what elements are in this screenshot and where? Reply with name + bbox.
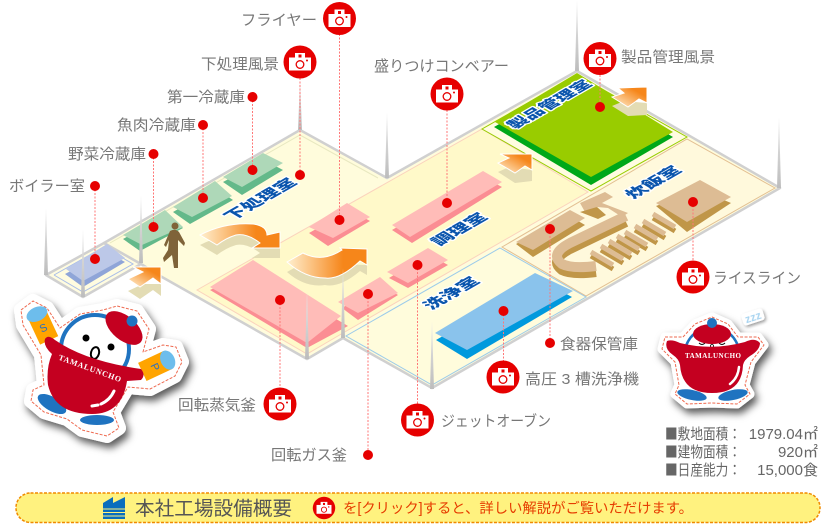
callout: tableware storage: 食器保管庫 bbox=[560, 335, 638, 353]
callout: tableware storage bbox=[545, 224, 638, 353]
room: rice cooking room bbox=[502, 139, 775, 296]
arrow: to product control bbox=[612, 87, 647, 116]
mascot: sleeping character: TAMALUNCHO bbox=[685, 352, 742, 360]
icon: camera bbox=[313, 497, 335, 519]
salt shaker bbox=[24, 303, 59, 345]
daily capacity bbox=[665, 459, 818, 480]
room label: washing room: 洗浄室 bbox=[419, 274, 484, 312]
callout: plating conveyor: 盛りつけコンベアー bbox=[374, 58, 509, 75]
site area bbox=[665, 423, 818, 444]
callout: vegetable cold room bbox=[68, 146, 158, 232]
callout: fryer: フライヤー bbox=[241, 12, 317, 29]
building area: 920㎡ bbox=[778, 444, 818, 461]
callout: rice line: ライスライン bbox=[713, 270, 801, 287]
callout: preparation scene bbox=[201, 46, 316, 180]
callout: rotary gas kettle bbox=[271, 289, 373, 464]
footer banner bbox=[16, 493, 820, 522]
callout: boiler room bbox=[9, 178, 100, 264]
equipment: high-pressure washer bbox=[435, 273, 573, 359]
site facts bbox=[665, 423, 818, 480]
equipment: fish and meat cold room bbox=[173, 181, 233, 224]
callout: rotary steam kettle bbox=[178, 295, 296, 420]
callout: high-pressure washer bbox=[486, 306, 639, 394]
mascot: salt and pepper character bbox=[21, 301, 182, 436]
callout: high-pressure washer: 高圧 3 槽洗浄機 bbox=[525, 371, 639, 388]
arrow: curved cooking flow bbox=[287, 248, 367, 285]
callout: rotary steam kettle: 回転蒸気釜 bbox=[178, 397, 256, 414]
room label: preparation room: 下処理室 bbox=[219, 176, 301, 223]
callout: fish and meat cold room: 魚肉冷蔵庫 bbox=[117, 117, 196, 134]
room label: product control room: 製品管理室 bbox=[502, 77, 596, 131]
equipment: rice line bbox=[557, 180, 731, 273]
pepper shaker bbox=[138, 348, 178, 381]
head bbox=[61, 315, 129, 383]
callout: jet oven bbox=[401, 260, 551, 436]
equipment: boiler bbox=[65, 244, 125, 287]
site area: ■敷地面積： bbox=[665, 423, 741, 444]
arrow: entry bbox=[128, 267, 161, 299]
equipment: tableware storage bbox=[516, 210, 585, 257]
site area: 1979.04㎡ bbox=[749, 426, 818, 443]
equipment: rotary gas kettle bbox=[338, 277, 398, 320]
feet bbox=[676, 387, 708, 403]
arrow: curved preparation flow bbox=[200, 224, 280, 258]
sleep bubble: zzz bbox=[744, 310, 763, 326]
hat bbox=[693, 324, 731, 344]
floor: boiler room bbox=[46, 243, 141, 297]
building area: ■建物面積： bbox=[665, 441, 741, 462]
room label: cooking room: 調理室 bbox=[427, 210, 492, 248]
pepper shaker: P bbox=[148, 361, 162, 373]
room: washing room bbox=[346, 248, 586, 385]
callout: first cold room bbox=[167, 89, 258, 175]
mascot: salt and pepper character: TAMALUNCHO bbox=[57, 353, 122, 384]
callout: fryer bbox=[241, 2, 356, 225]
body bbox=[45, 337, 143, 414]
callout: fish and meat cold room bbox=[117, 117, 208, 203]
equipment: fryer bbox=[309, 203, 370, 246]
sticker backing bbox=[662, 317, 764, 404]
equipment: vegetable cold room bbox=[123, 210, 183, 251]
arrow: cooking to product bbox=[498, 154, 532, 183]
footer title: 本社工場設備概要 bbox=[135, 498, 292, 520]
callout: plating conveyor bbox=[374, 58, 509, 208]
callout: boiler room: ボイラー室 bbox=[9, 178, 85, 195]
equipment: rotary steam kettle bbox=[210, 260, 348, 348]
sticker backing bbox=[21, 301, 182, 436]
daily capacity: ■日産能力： bbox=[665, 459, 741, 480]
room: cooking room bbox=[197, 129, 588, 354]
salt shaker: S bbox=[38, 322, 50, 336]
head bbox=[684, 328, 740, 352]
equipment: jet oven bbox=[387, 248, 448, 288]
equipment: product control area bbox=[494, 73, 673, 185]
body bbox=[666, 340, 760, 393]
building corner pillars bbox=[44, 0, 781, 389]
icon: factory bbox=[103, 497, 125, 519]
room label: rice room: 炊飯室 bbox=[621, 163, 686, 201]
feet bbox=[35, 390, 69, 418]
callout: rotary gas kettle: 回転ガス釜 bbox=[271, 447, 347, 464]
room: product control room bbox=[482, 75, 687, 191]
hat bbox=[99, 305, 149, 351]
equipment: first cold room bbox=[223, 153, 283, 195]
callout: preparation scene: 下処理風景 bbox=[201, 56, 279, 73]
floor: main building bbox=[104, 71, 780, 388]
daily capacity: 15,000食 bbox=[757, 462, 818, 479]
footer note: を[クリック]すると、詳しい解説がご覧いただけます。 bbox=[343, 500, 693, 517]
icon: walking person bbox=[163, 222, 185, 268]
callout: vegetable cold room: 野菜冷蔵庫 bbox=[68, 146, 146, 163]
callout: jet oven: ジェットオーブン bbox=[441, 412, 551, 430]
building area bbox=[665, 441, 818, 462]
building floor plan bbox=[46, 71, 780, 388]
callout: first cold room: 第一冷蔵庫 bbox=[167, 89, 245, 106]
equipment: plating conveyor bbox=[392, 171, 502, 243]
callout: product control scene bbox=[584, 42, 715, 112]
callout: rice line bbox=[676, 197, 801, 294]
mascot: sleeping character bbox=[662, 308, 766, 404]
callout: product control scene: 製品管理風景 bbox=[621, 48, 715, 66]
